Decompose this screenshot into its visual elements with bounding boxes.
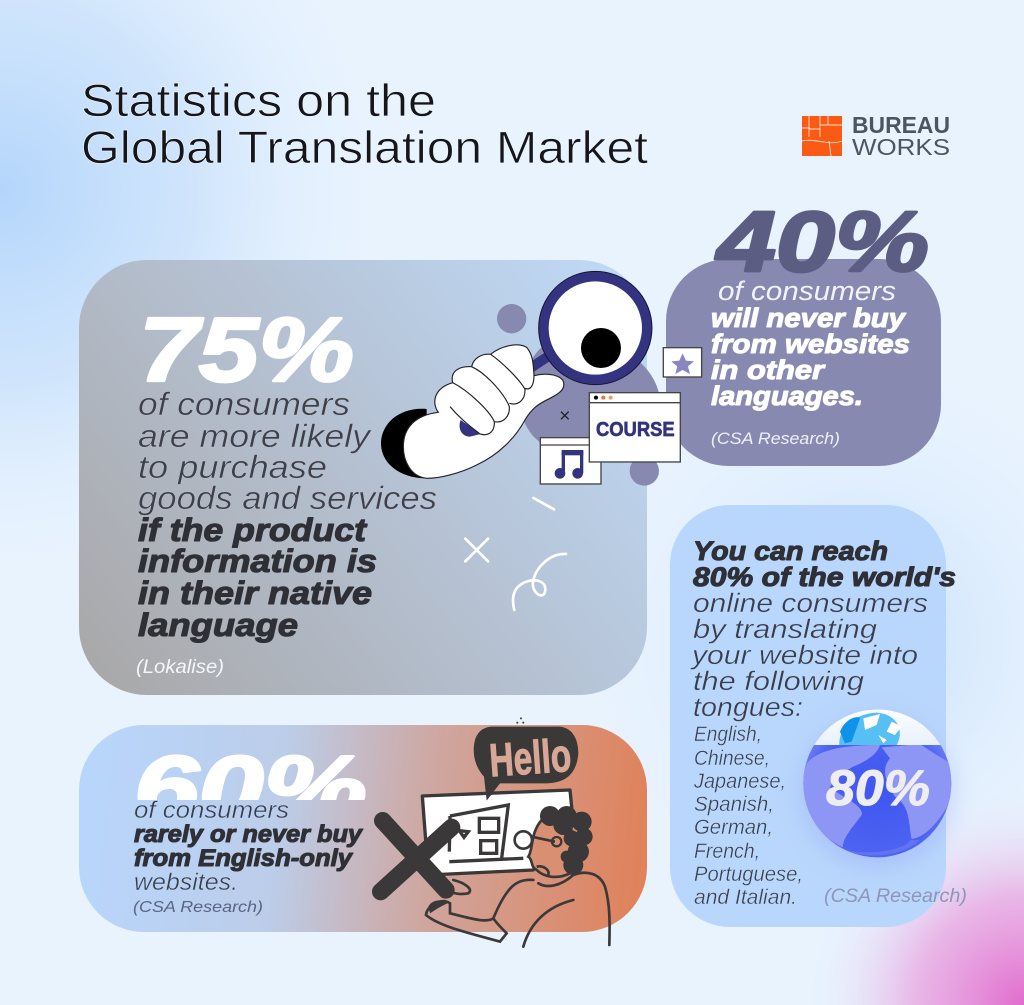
icon: hand: [381, 345, 564, 478]
panel: 40% of consumers: [666, 195, 941, 466]
illustration: person at monitor saying Hello: [381, 717, 610, 947]
illustration: hand with magnifying glass and windows: [381, 271, 702, 486]
body text: [134, 797, 364, 896]
language list: Japanese,: [693, 770, 786, 793]
body text: [690, 536, 956, 722]
small x: [561, 412, 569, 419]
polar cap: [814, 709, 940, 745]
body text: [138, 386, 437, 643]
icon: magnifying glass: [530, 271, 652, 385]
window: course: COURSE: [596, 418, 675, 441]
speech bubble: [474, 717, 578, 801]
body text: information is: [138, 543, 377, 579]
window: star: [663, 348, 702, 377]
language list: German,: [694, 816, 773, 839]
body text: in their native: [138, 575, 372, 611]
language list: Spanish,: [694, 793, 774, 816]
stat: 40%: 40%: [715, 195, 929, 290]
icon: globe with 80%: [797, 703, 957, 868]
body text: of consumers: [718, 276, 896, 306]
continents: [800, 744, 953, 847]
body text: are more likely: [138, 418, 372, 454]
body text: languages.: [711, 381, 863, 411]
monitor: [422, 790, 572, 875]
title: [81, 75, 649, 173]
body text: websites.: [134, 869, 238, 896]
body text: goods and services: [138, 480, 437, 516]
stat: 60%: 60%: [134, 737, 367, 837]
body text: of consumers: [134, 797, 289, 824]
source: Lokalise: (Lokalise): [136, 657, 224, 678]
source: CSA Research: (CSA Research): [711, 429, 840, 448]
body text: by translating: [693, 614, 877, 644]
body text: will never buy: [711, 303, 907, 333]
person: [426, 806, 610, 947]
big X: [381, 821, 452, 892]
body text: online consumers: [693, 588, 928, 618]
logo wordmark: [852, 112, 950, 160]
language list: Portuguese,: [694, 863, 803, 886]
body text: in other: [711, 355, 826, 385]
body text: from English-only: [134, 845, 354, 872]
logo wordmark: BUREAU: [852, 112, 950, 138]
body text: to purchase: [138, 449, 327, 485]
purple blobs: [497, 304, 660, 486]
panel: website translation: [670, 505, 967, 927]
body text: rarely or never buy: [134, 821, 364, 848]
window: music: [540, 438, 601, 484]
body text: from websites: [711, 329, 910, 359]
body text: the following: [693, 666, 864, 696]
screen content: [449, 805, 523, 862]
title: Statistics on the: [81, 75, 436, 126]
body text: tongues:: [693, 692, 803, 722]
stat: 80%: 80%: [826, 760, 930, 816]
language list: and Italian.: [694, 886, 797, 909]
body text: of consumers: [138, 386, 350, 422]
source: CSA Research: (CSA Research): [824, 886, 967, 907]
body text: You can reach: [693, 536, 888, 566]
icon: orange brick square: [802, 116, 842, 156]
language list: Chinese,: [694, 747, 770, 770]
body text: language: [138, 607, 298, 643]
source: CSA Research: (CSA Research): [133, 899, 263, 916]
body text: 80% of the world's: [693, 562, 956, 592]
panel: 75% of consumers: [79, 260, 647, 695]
language list: French,: [694, 840, 760, 863]
speech bubble: Hello: [488, 729, 573, 787]
body text: [711, 276, 910, 411]
title: Global Translation Market: [81, 122, 649, 173]
window: course: [589, 393, 680, 462]
logo: Bureau Works: [802, 112, 950, 160]
body text: your website into: [690, 640, 918, 670]
panel: 60% of consumers: [79, 725, 647, 932]
stat: 75%: 75%: [139, 300, 354, 401]
decorative doodles: [465, 498, 566, 610]
logo wordmark: WORKS: [852, 134, 950, 160]
body text: if the product: [138, 512, 367, 548]
language list: English,: [694, 723, 762, 746]
language list: [693, 723, 803, 909]
